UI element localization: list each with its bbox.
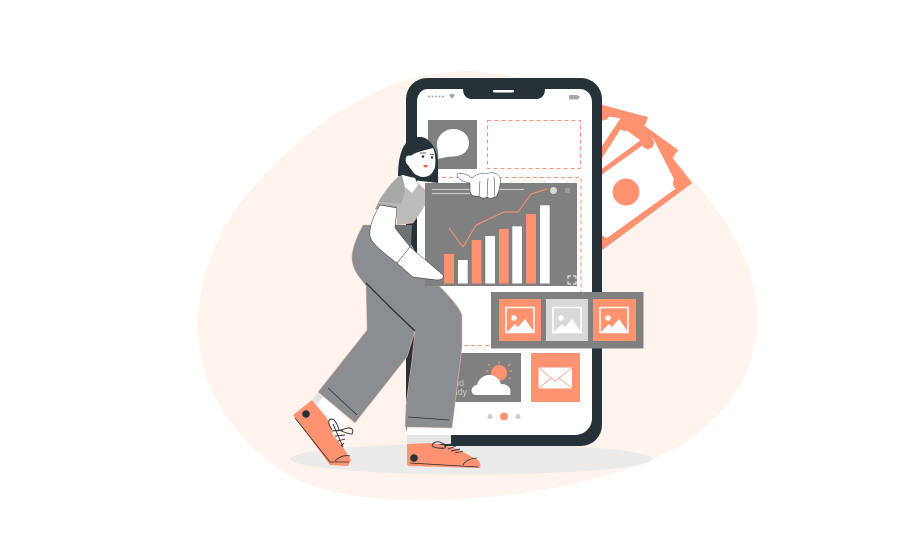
image tile 1	[499, 299, 541, 341]
speaker	[493, 90, 514, 92]
front sock	[407, 427, 451, 444]
face	[406, 148, 435, 177]
chart panel	[425, 183, 577, 286]
phone screen	[417, 89, 592, 435]
cloud	[472, 375, 511, 395]
back shoe	[293, 400, 353, 466]
image tile 2	[546, 299, 588, 341]
panel header lines	[432, 190, 524, 194]
person	[293, 137, 480, 468]
sun	[486, 361, 512, 381]
tucked shirt waist	[395, 225, 412, 246]
back sock	[312, 392, 348, 428]
shirt	[375, 175, 425, 246]
weather tile	[439, 353, 521, 402]
weather tile: Cloud	[440, 378, 464, 388]
ground shadow	[290, 444, 652, 474]
smartphone	[406, 78, 602, 446]
hair	[398, 137, 438, 183]
hand on chart panel	[457, 173, 500, 198]
empty dashed placeholder	[488, 120, 580, 168]
status bar	[428, 94, 580, 100]
bar chart	[444, 205, 550, 284]
phone body	[406, 78, 602, 446]
image gallery panel	[491, 292, 644, 348]
chat tile	[428, 120, 477, 169]
image tile 3	[593, 299, 636, 341]
front shoe	[407, 442, 480, 468]
back banknote	[595, 103, 648, 180]
trend line	[449, 189, 547, 247]
panel icons	[550, 187, 576, 284]
pagination dots	[487, 412, 521, 420]
trousers	[318, 225, 462, 428]
weather tile: Cloudy	[439, 387, 467, 397]
middle banknote	[585, 112, 678, 205]
arm and lower hand	[370, 205, 443, 280]
dashed chart placeholder	[428, 178, 581, 346]
mail tile	[531, 353, 580, 402]
background blob	[198, 71, 757, 500]
front banknote	[560, 132, 692, 250]
banknotes	[560, 103, 692, 250]
